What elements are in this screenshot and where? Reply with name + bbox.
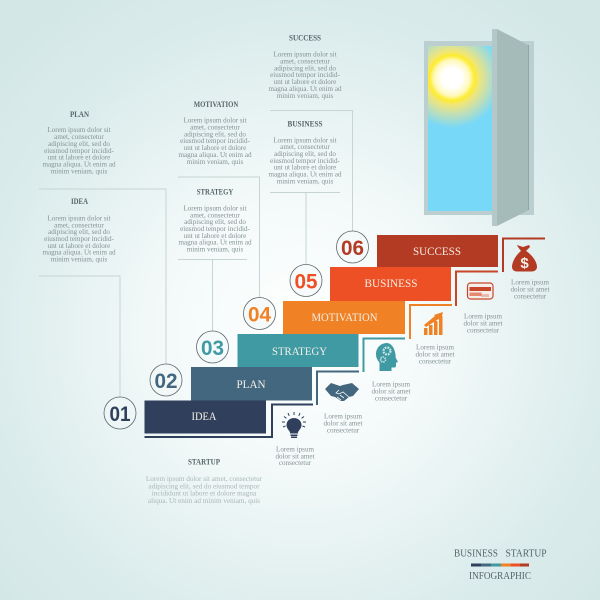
text block: idea: minim veniam, quis xyxy=(51,256,108,264)
text block: plan: adipiscing elit, sed do xyxy=(48,140,110,148)
icon caption: bulb xyxy=(275,445,315,467)
text block: success: minim veniam, quis xyxy=(277,92,334,100)
step: success: SUCCESS xyxy=(413,244,461,258)
text block: strategy: eiusmod tempor incidid- xyxy=(180,225,251,233)
startup text block: incididunt ut labore et dolore magna xyxy=(152,490,257,498)
text block: strategy: adipiscing elit, sed do xyxy=(184,218,246,226)
icon caption: bulb: dolor sit amet xyxy=(275,452,315,460)
text block: motivation: eiusmod tempor incidid- xyxy=(180,137,251,145)
footer brand: BUSINESS xyxy=(454,548,498,560)
step: success xyxy=(377,235,545,272)
text block: plan: unt ut labore et dolore xyxy=(48,154,110,162)
text block: business: magna aliqua. Ut enim ad xyxy=(268,170,342,178)
text block: plan: magna aliqua. Ut enim ad xyxy=(42,160,116,168)
step: plan: PLAN xyxy=(236,377,266,391)
icon caption: money bag: dolor sit amet xyxy=(510,286,550,294)
icon caption: head: Lorem ipsum xyxy=(372,381,410,389)
text block: idea xyxy=(42,197,116,264)
number badge 05: 05 xyxy=(294,270,318,294)
text block: idea: magna aliqua. Ut enim ad xyxy=(42,249,116,257)
text block: plan: minim veniam, quis xyxy=(51,167,108,175)
text block: strategy: Lorem ipsum dolor sit xyxy=(183,204,247,212)
text block: strategy: amet, consectetur xyxy=(190,211,240,219)
number badge 01 xyxy=(104,397,136,429)
text block: idea: amet, consectetur xyxy=(54,221,104,229)
icon caption: bulb: Lorem ipsum xyxy=(276,445,314,453)
icon caption: card: consectetur xyxy=(467,326,500,334)
icon caption: card: dolor sit amet xyxy=(463,320,503,328)
icon caption: card xyxy=(463,313,503,334)
text block: strategy xyxy=(178,188,252,254)
icon caption: chart: consectetur xyxy=(419,358,452,366)
step: business: BUSINESS xyxy=(364,276,418,290)
text block: idea: IDEA xyxy=(71,197,88,206)
number badge 06: 06 xyxy=(341,237,364,260)
icon caption: head: dolor sit amet xyxy=(371,388,411,396)
text block: idea: eiusmod tempor incidid- xyxy=(44,235,115,243)
step: motivation: MOTIVATION xyxy=(312,310,378,324)
step: plan xyxy=(191,367,359,405)
connector lines xyxy=(39,110,352,397)
icon: head with gears xyxy=(376,343,398,371)
text block: motivation: magna aliqua. Ut enim ad xyxy=(178,151,252,159)
icon caption: handshake: dolor sit amet xyxy=(323,420,363,428)
icon caption: money bag xyxy=(510,278,550,300)
text block: motivation xyxy=(178,100,252,166)
step: motivation xyxy=(283,301,452,339)
text block: motivation: amet, consectetur xyxy=(190,124,240,132)
text block: success: Lorem ipsum dolor sit xyxy=(273,51,337,59)
startup text block: aliqua. Ut enim ad minim veniam, quis xyxy=(148,497,260,505)
icon caption: chart xyxy=(415,344,455,366)
step: strategy xyxy=(238,334,405,372)
icon caption: handshake: consectetur xyxy=(327,426,360,434)
text block: business: BUSINESS xyxy=(288,120,323,129)
number badge 06 xyxy=(336,231,368,263)
number badge 02 xyxy=(150,364,182,396)
text block: success: magna aliqua. Ut enim ad xyxy=(268,85,342,93)
number badge 03 xyxy=(196,331,228,363)
startup text block: STARTUP xyxy=(188,458,220,466)
text block: business: amet, consectetur xyxy=(280,143,330,151)
text block: motivation: adipiscing elit, sed do xyxy=(184,130,246,138)
number badge 03: 03 xyxy=(201,337,224,360)
number badge 01: 01 xyxy=(110,403,131,426)
number badge 02: 02 xyxy=(154,370,178,393)
icon: credit card xyxy=(468,283,493,299)
text block: idea: Lorem ipsum dolor sit xyxy=(47,214,111,222)
icon caption: head: consectetur xyxy=(375,394,408,402)
text block: plan: amet, consectetur xyxy=(54,133,104,141)
text block: business: adipiscing elit, sed do xyxy=(274,150,336,158)
icon: light bulb xyxy=(282,412,306,438)
icon caption: handshake: Lorem ipsum xyxy=(324,413,362,421)
icon: handshake xyxy=(325,383,359,401)
text block: plan: Lorem ipsum dolor sit xyxy=(47,126,111,134)
step: strategy: STRATEGY xyxy=(272,344,327,358)
step: idea xyxy=(144,400,313,437)
text block: success: eiusmod tempor incidid- xyxy=(270,71,341,79)
icon caption: card: Lorem ipsum xyxy=(464,313,502,321)
step: business xyxy=(330,267,498,306)
text block: strategy: STRATEGY xyxy=(197,188,233,196)
text block: strategy: unt ut labore et dolore xyxy=(184,232,246,240)
text block: success: amet, consectetur xyxy=(280,58,330,66)
icon caption: money bag: consectetur xyxy=(514,292,547,300)
icon caption: chart: Lorem ipsum xyxy=(416,344,454,352)
text block: motivation: Lorem ipsum dolor sit xyxy=(183,117,247,125)
icon: money bag xyxy=(512,245,537,272)
icon caption: head xyxy=(371,381,411,402)
text block: business: unt ut labore et dolore xyxy=(274,164,336,172)
startup text block: Lorem ipsum dolor sit amet, consectetur xyxy=(146,475,263,483)
text block: plan: PLAN xyxy=(70,110,89,119)
footer brand: INFOGRAPHIC xyxy=(469,571,531,582)
text block: plan xyxy=(42,110,116,175)
text block: idea: unt ut labore et dolore xyxy=(48,242,110,250)
footer brand xyxy=(454,548,547,582)
text block: plan: eiusmod tempor incidid- xyxy=(44,147,115,155)
step: idea: IDEA xyxy=(192,409,217,423)
text block: motivation: MOTIVATION xyxy=(194,100,238,109)
text block: motivation: unt ut labore et dolore xyxy=(184,144,246,152)
icon caption: bulb: consectetur xyxy=(279,459,312,467)
text block: idea: adipiscing elit, sed do xyxy=(48,228,110,236)
icon caption: money bag: Lorem ipsum xyxy=(511,278,549,286)
text block: success xyxy=(268,34,342,100)
text block: strategy: magna aliqua. Ut enim ad xyxy=(178,239,252,247)
text block: success: adipiscing elit, sed do xyxy=(274,64,336,72)
icon caption: chart: dolor sit amet xyxy=(415,351,455,359)
text block: success: SUCCESS xyxy=(289,34,321,42)
startup text block: adipiscing elit, sed do eiusmod tempor xyxy=(148,482,260,490)
footer brand: STARTUP xyxy=(506,548,547,560)
text block: business: minim veniam, quis xyxy=(277,177,334,185)
icon: bar chart with arrow xyxy=(424,312,443,335)
text block: strategy: minim veniam, quis xyxy=(187,246,244,254)
icon: money bag: $ xyxy=(520,255,529,272)
text block: success: unt ut labore et dolore xyxy=(274,78,336,86)
text block: business xyxy=(268,120,342,185)
text block: business: Lorem ipsum dolor sit xyxy=(273,136,337,144)
startup text block xyxy=(146,458,263,505)
number badge 04: 04 xyxy=(248,304,271,326)
text block: business: eiusmod tempor incidid- xyxy=(270,157,341,165)
number badge 04 xyxy=(244,298,276,330)
icon caption: handshake xyxy=(323,413,363,434)
open door with sunlight xyxy=(424,29,534,226)
text block: motivation: minim veniam, quis xyxy=(187,158,244,166)
number badge 05 xyxy=(290,264,322,296)
